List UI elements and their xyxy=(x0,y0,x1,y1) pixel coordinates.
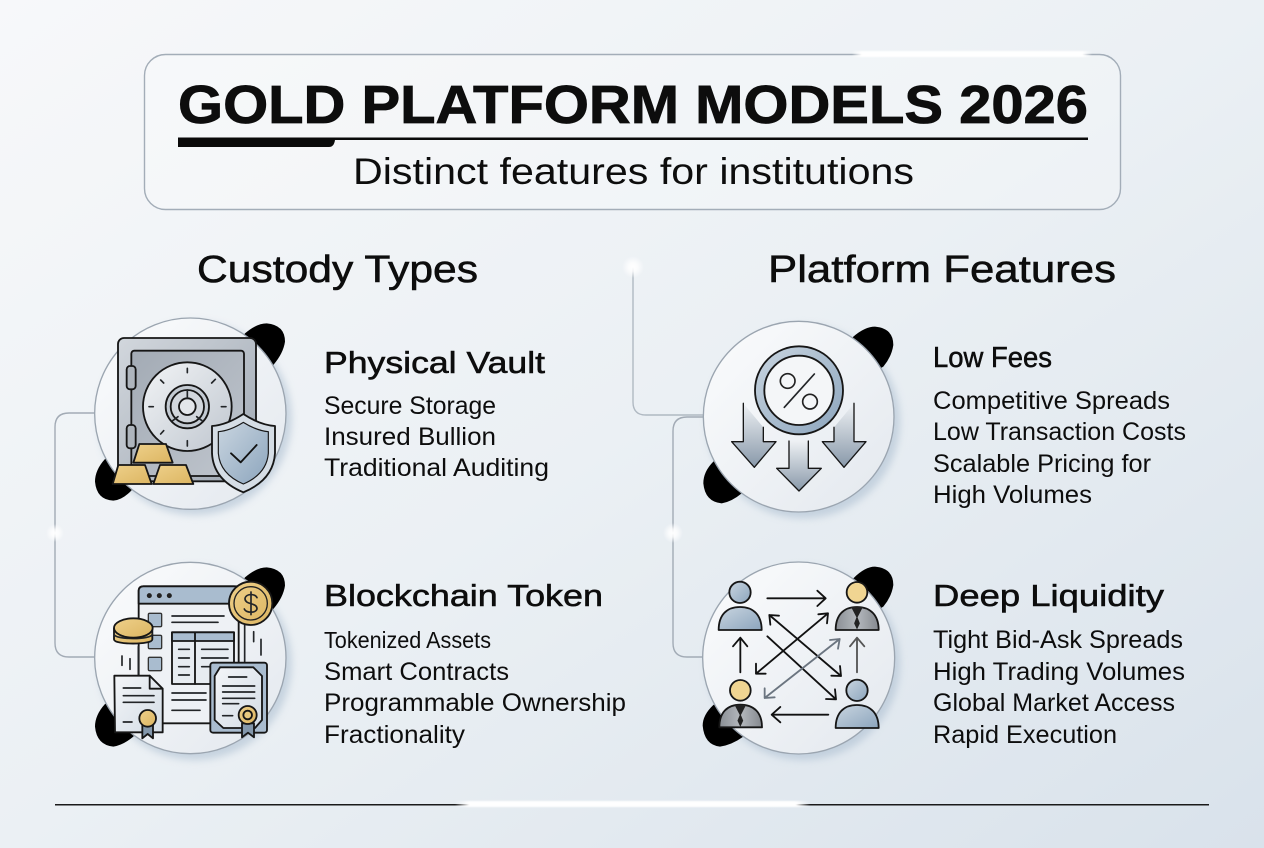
list: Competitive Spreads xyxy=(933,387,1170,415)
list: High Trading Volumes xyxy=(933,658,1185,686)
connector: custody xyxy=(46,413,95,657)
list: Low Transaction Costs xyxy=(933,418,1186,446)
list: Programmable Ownership xyxy=(324,689,626,717)
title underline xyxy=(178,138,1088,147)
title: GOLD PLATFORM MODELS 2026 xyxy=(178,75,1088,135)
connector: features to header node xyxy=(622,256,703,415)
subtitle: Distinct features for institutions xyxy=(353,151,914,192)
heading: Deep Liquidity xyxy=(933,578,1165,613)
list: Rapid Execution xyxy=(933,721,1117,749)
list xyxy=(324,392,549,482)
list: Tight Bid-Ask Spreads xyxy=(933,626,1183,654)
list: High Volumes xyxy=(933,481,1092,509)
heading: Physical Vault xyxy=(324,345,545,380)
list: Fractionality xyxy=(324,721,466,749)
header panel xyxy=(144,51,1120,210)
list: Secure Storage xyxy=(324,392,496,420)
section heading: platform features: Platform Features xyxy=(768,249,1116,291)
list: Tokenized Assets xyxy=(324,627,491,653)
text block: deep liquidity xyxy=(933,578,1185,749)
list xyxy=(933,626,1185,749)
heading: Blockchain Token xyxy=(324,578,603,613)
list xyxy=(324,627,626,749)
footer rule xyxy=(55,801,1209,807)
list: Smart Contracts xyxy=(324,658,509,686)
text block: physical vault xyxy=(324,345,549,482)
icon: vault xyxy=(95,318,292,515)
icon: low fees xyxy=(703,321,900,518)
section heading: custody types: Custody Types xyxy=(197,249,478,291)
text block: low fees xyxy=(933,342,1186,509)
list: Global Market Access xyxy=(933,689,1175,717)
connector: platform features xyxy=(663,417,703,657)
text block: blockchain token xyxy=(324,578,626,749)
list xyxy=(933,387,1186,509)
list: Insured Bullion xyxy=(324,423,496,451)
header highlight xyxy=(852,51,1092,57)
list: Scalable Pricing for xyxy=(933,450,1151,478)
heading: Low Fees xyxy=(933,342,1052,374)
icon: blockchain token xyxy=(95,562,292,760)
list: Traditional Auditing xyxy=(324,454,549,482)
icon: deep liquidity network xyxy=(703,562,900,760)
